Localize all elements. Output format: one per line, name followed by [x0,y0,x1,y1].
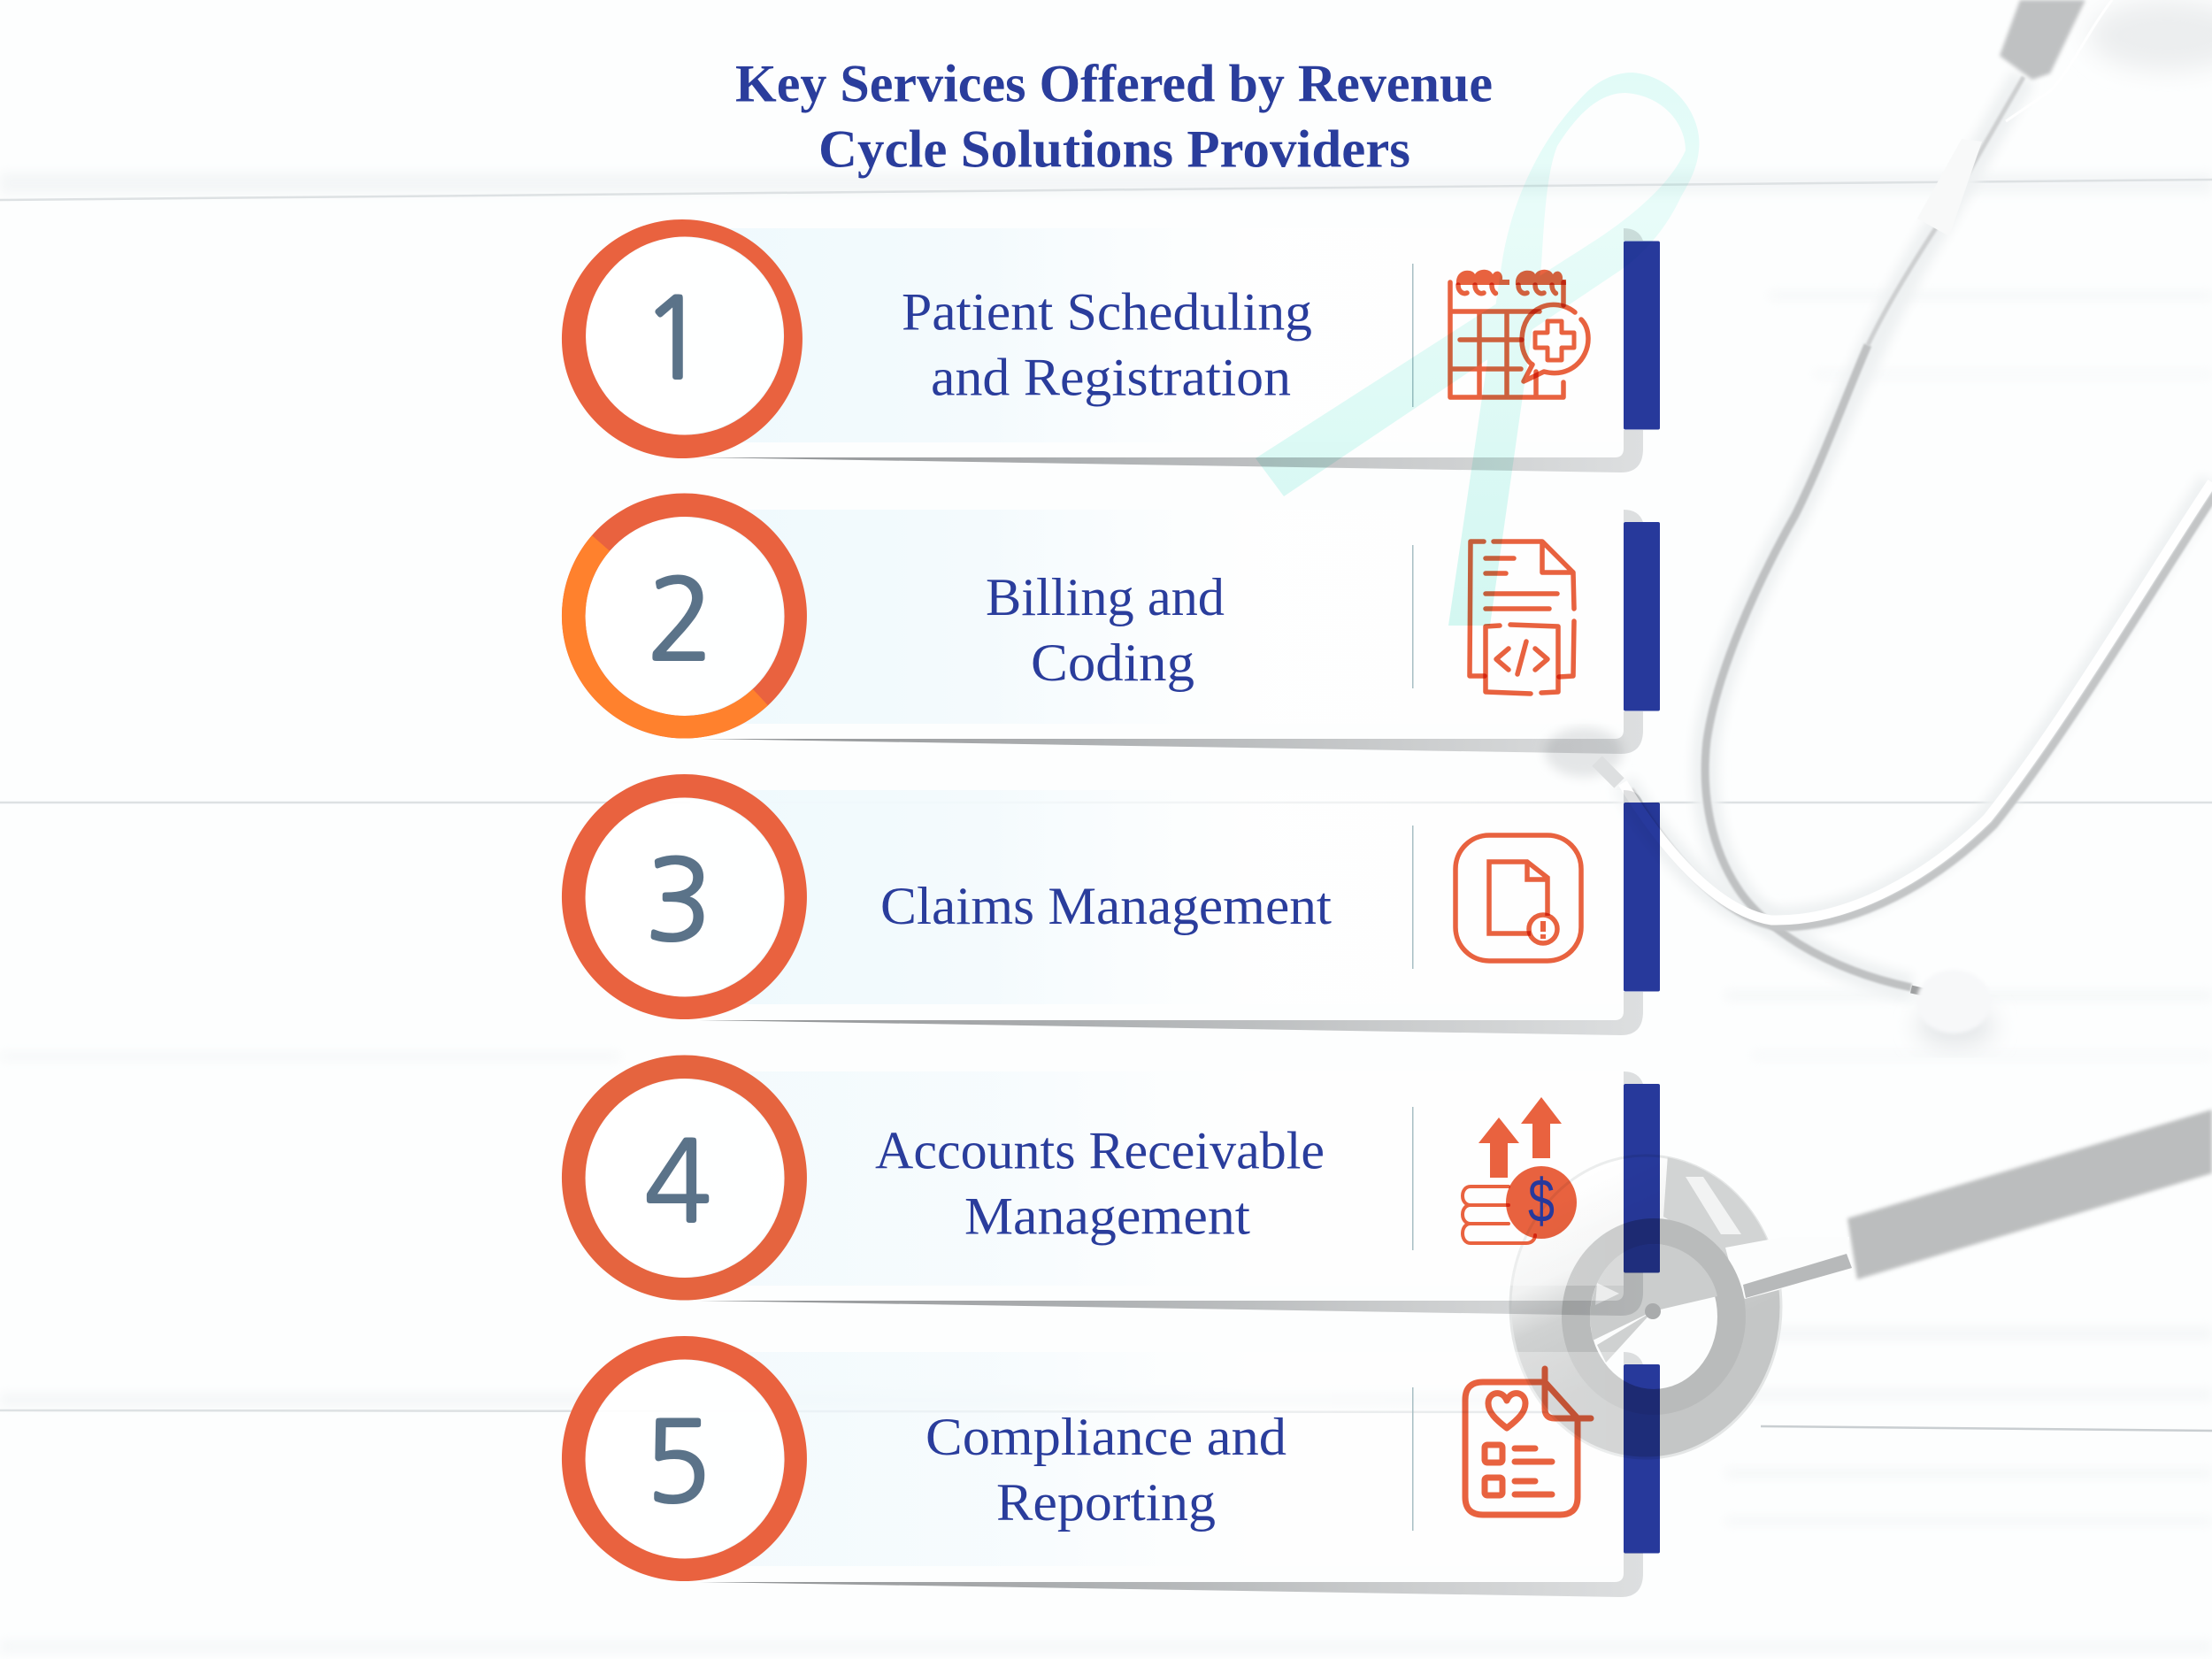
label: Compliance and [926,1408,1286,1466]
title: Key Services Offered by Revenue [735,55,1493,113]
orange arc segment [562,535,768,738]
icon: dollar coins and up arrows [1463,1097,1577,1243]
card background [690,1352,1624,1566]
title: Cycle Solutions Providers [818,120,1410,179]
card bracket [699,1071,1643,1316]
label [926,1408,1286,1532]
number ring [562,774,807,1019]
title [735,55,1493,179]
card bracket [699,228,1643,472]
number: 2 [647,565,714,675]
awareness ribbon [1256,73,1699,626]
card bracket [699,1352,1643,1597]
card background [690,510,1624,724]
ring interior [586,1079,784,1277]
divider [1412,1387,1414,1531]
card bracket [699,510,1643,754]
card bracket [699,790,1643,1035]
label: Reporting [996,1473,1216,1532]
label: Accounts Receivable [875,1122,1325,1180]
divider [1412,1107,1414,1250]
stethoscope: tubing and earpieces [1545,0,2212,1046]
card background [690,790,1624,1004]
stethoscope: chestpiece [1510,1110,2212,1458]
number ring [562,1336,807,1581]
ring interior [586,518,784,715]
divider [1412,826,1414,969]
number ring [562,1055,807,1300]
panel: 2 Billing and Coding [562,494,1643,754]
icon: code document [1470,541,1574,694]
label: Billing and [986,568,1225,626]
label: Management [964,1187,1250,1246]
icon: dollar coins and up arrows: $ [1528,1166,1555,1235]
icon: health record checklist [1465,1369,1591,1515]
label: Claims Management [880,877,1332,935]
number: 3 [645,845,712,956]
number: 4 [644,1126,711,1237]
accent bars [1624,241,1660,1554]
number ring [562,219,803,458]
icon: document with alert [1455,835,1581,961]
label: and Registration [931,349,1291,407]
number ring [562,494,807,738]
label: Coding [1031,634,1194,692]
ring interior [586,1361,784,1557]
panel: 4 Accounts Receivable Management [562,1055,1643,1316]
label [986,568,1225,692]
panel: 3 Claims Management [562,774,1643,1035]
label [875,1122,1325,1246]
number: 1 [641,283,708,394]
label: Patient Scheduling [902,283,1312,342]
number: 5 [644,1407,711,1517]
divider [1412,545,1414,688]
ring interior [586,798,784,996]
label [902,283,1312,407]
ring interior [587,237,783,434]
card background [690,228,1624,442]
panel: 5 Compliance and Reporting [562,1336,1643,1597]
icon: calendar with medical cross [1450,270,1588,397]
divider [1412,264,1414,407]
card background [690,1071,1624,1286]
panel: 1 Patient Scheduling and Registration [562,219,1643,472]
